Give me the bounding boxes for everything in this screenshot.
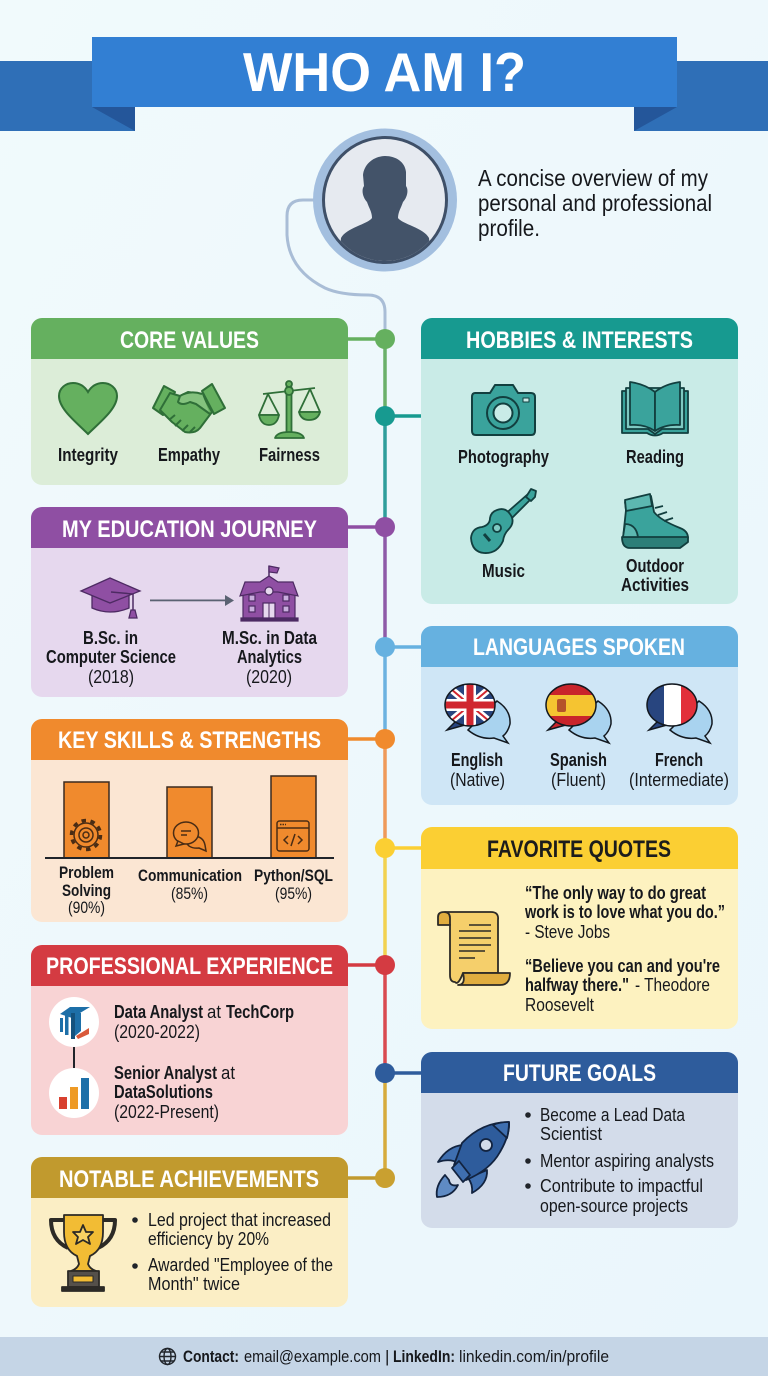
degree: bachelor: B.Sc. in — [83, 628, 138, 648]
label: outdoor activities: Activities — [621, 575, 689, 595]
goal list — [525, 1105, 714, 1216]
panel: notable achievements — [31, 1157, 348, 1307]
icon: trophy — [51, 1215, 115, 1291]
icon: scroll — [438, 912, 510, 985]
footer contact bar — [0, 1337, 768, 1376]
panel: hobbies and interests: HOBBIES & INTERESTS — [466, 327, 693, 354]
intro text: A concise overview of my — [478, 165, 708, 191]
skill label: python/sql: (95%) — [275, 885, 312, 903]
quote: theodore roosevelt — [525, 956, 720, 1015]
contact text: | — [385, 1347, 389, 1366]
label: spanish: Spanish — [550, 750, 607, 770]
icon: bar chart logo — [49, 1068, 99, 1118]
skill label: python/sql — [254, 867, 333, 903]
skill label: problem solving — [59, 864, 114, 917]
timeline — [348, 329, 421, 1188]
intro text: personal and professional — [478, 190, 712, 216]
goal list: Scientist — [540, 1124, 602, 1144]
icon: gear — [72, 820, 100, 850]
job: senior analyst: Senior Analyst — [114, 1063, 217, 1083]
skill label: problem solving: (90%) — [68, 899, 105, 917]
panel: key skills — [31, 719, 348, 922]
icon: globe — [160, 1348, 176, 1364]
skill label: problem solving: Problem — [59, 864, 114, 882]
icon: handshake — [153, 384, 225, 432]
quote: steve jobs: - Steve Jobs — [525, 922, 610, 942]
goal list: Contribute to impactful — [540, 1176, 703, 1196]
contact text: email@example.com — [244, 1347, 381, 1366]
degree: master: Analytics — [237, 647, 302, 667]
icon: hiking boot — [622, 494, 688, 548]
degree: bachelor: Computer Science — [46, 647, 176, 667]
panel: education journey — [31, 507, 348, 697]
icon: code window — [277, 821, 309, 851]
label: empathy: Empathy — [158, 445, 220, 465]
job: data analyst: TechCorp — [226, 1002, 294, 1022]
panel: future goals: FUTURE GOALS — [503, 1060, 656, 1087]
profile avatar — [313, 128, 457, 272]
degree: master: M.Sc. in Data — [222, 628, 318, 648]
panel: favorite quotes — [421, 827, 738, 1029]
quote: steve jobs: “The only way to do great — [525, 883, 706, 903]
icon: graduation cap — [81, 578, 140, 618]
arrow: degree progression — [150, 595, 234, 606]
panel: languages spoken — [421, 626, 738, 805]
icon: university building — [240, 566, 298, 621]
icon: camera — [472, 385, 535, 435]
label: outdoor activities: Outdoor — [626, 556, 684, 576]
label: music: Music — [482, 561, 525, 581]
achievement list: efficiency by 20% — [148, 1229, 269, 1249]
intro text — [478, 165, 712, 241]
label: integrity: Integrity — [58, 445, 118, 465]
icon: scales — [259, 381, 320, 438]
label: outdoor activities — [621, 556, 689, 595]
title banner: WHO AM I? — [243, 41, 526, 103]
quote: steve jobs — [524, 883, 725, 942]
job: senior analyst: (2022-Present) — [114, 1102, 219, 1122]
achievement list: Awarded "Employee of the — [148, 1255, 333, 1275]
title banner — [0, 37, 768, 131]
quote: steve jobs: work is to love what you do.” — [524, 902, 725, 922]
job: data analyst: Data Analyst — [114, 1002, 203, 1022]
icon: open book — [622, 382, 688, 436]
bar chart — [45, 776, 334, 859]
connector from avatar to timeline — [287, 200, 385, 340]
panel: core values: CORE VALUES — [120, 327, 259, 354]
label: photography: Photography — [458, 447, 549, 467]
panel: core values — [31, 318, 348, 485]
contact text: Contact: — [183, 1347, 239, 1366]
icon: spanish flag bubble — [546, 684, 611, 743]
panel: professional experience — [31, 945, 348, 1135]
goal list: Mentor aspiring analysts — [540, 1151, 714, 1171]
icon: rocket — [437, 1122, 509, 1197]
label: fairness: Fairness — [259, 445, 320, 465]
label: french: French — [655, 750, 703, 770]
degree: bachelor — [46, 628, 176, 687]
label: english: English — [451, 750, 503, 770]
panel: notable achievements: NOTABLE ACHIEVEMENTS — [59, 1166, 319, 1193]
goal list: Become a Lead Data — [540, 1105, 686, 1125]
icon: techcorp logo — [49, 997, 99, 1047]
job: senior analyst: DataSolutions — [114, 1082, 213, 1102]
achievement list — [132, 1210, 333, 1294]
panel: favorite quotes: FAVORITE QUOTES — [487, 836, 671, 863]
label: spanish — [550, 750, 607, 790]
skill label: communication — [138, 867, 242, 903]
label: french — [629, 750, 729, 790]
label: spanish: (Fluent) — [551, 770, 606, 790]
job: data analyst: (2020-2022) — [114, 1022, 200, 1042]
quote: theodore roosevelt: - Theodore — [635, 975, 710, 995]
experience connector — [73, 1046, 75, 1070]
achievement list: Month" twice — [148, 1274, 240, 1294]
quote: theodore roosevelt: Roosevelt — [525, 995, 594, 1015]
panel: hobbies and interests — [421, 318, 738, 604]
job: data analyst: at — [207, 1002, 221, 1022]
contact text — [183, 1347, 609, 1366]
panel: key skills: KEY SKILLS & STRENGTHS — [58, 727, 321, 754]
job: data analyst — [114, 1002, 294, 1042]
intro text: profile. — [478, 215, 540, 241]
quote: theodore roosevelt: halfway there." — [525, 975, 629, 995]
label: french: (Intermediate) — [629, 770, 729, 790]
panel: professional experience: PROFESSIONAL EXPERIENCE — [46, 953, 333, 980]
contact text: linkedin.com/in/profile — [459, 1347, 609, 1366]
icon: french flag bubble — [647, 684, 712, 743]
contact text: LinkedIn: — [393, 1347, 455, 1366]
skill label: python/sql: Python/SQL — [254, 867, 333, 885]
label: reading: Reading — [626, 447, 684, 467]
degree: master: (2020) — [246, 667, 292, 687]
achievement list: Led project that increased — [148, 1210, 331, 1230]
label: english — [450, 750, 505, 790]
panel: future goals — [421, 1052, 738, 1228]
job: senior analyst: at — [221, 1063, 235, 1083]
label: english: (Native) — [450, 770, 505, 790]
icon: english flag bubble — [445, 684, 510, 743]
quote: theodore roosevelt: “Believe you can and you're — [525, 956, 720, 976]
degree: bachelor: (2018) — [88, 667, 134, 687]
skill label: communication: (85%) — [171, 885, 208, 903]
icon: guitar — [471, 489, 536, 553]
skill label: communication: Communication — [138, 867, 242, 885]
panel: languages spoken: LANGUAGES SPOKEN — [473, 634, 685, 661]
panel: education journey: MY EDUCATION JOURNEY — [62, 516, 317, 543]
goal list: open-source projects — [540, 1196, 688, 1216]
icon: chat bubbles — [174, 822, 206, 851]
icon: heart — [59, 383, 117, 434]
skill label: problem solving: Solving — [62, 882, 111, 900]
job: senior analyst — [114, 1063, 235, 1122]
degree: master — [222, 628, 318, 687]
